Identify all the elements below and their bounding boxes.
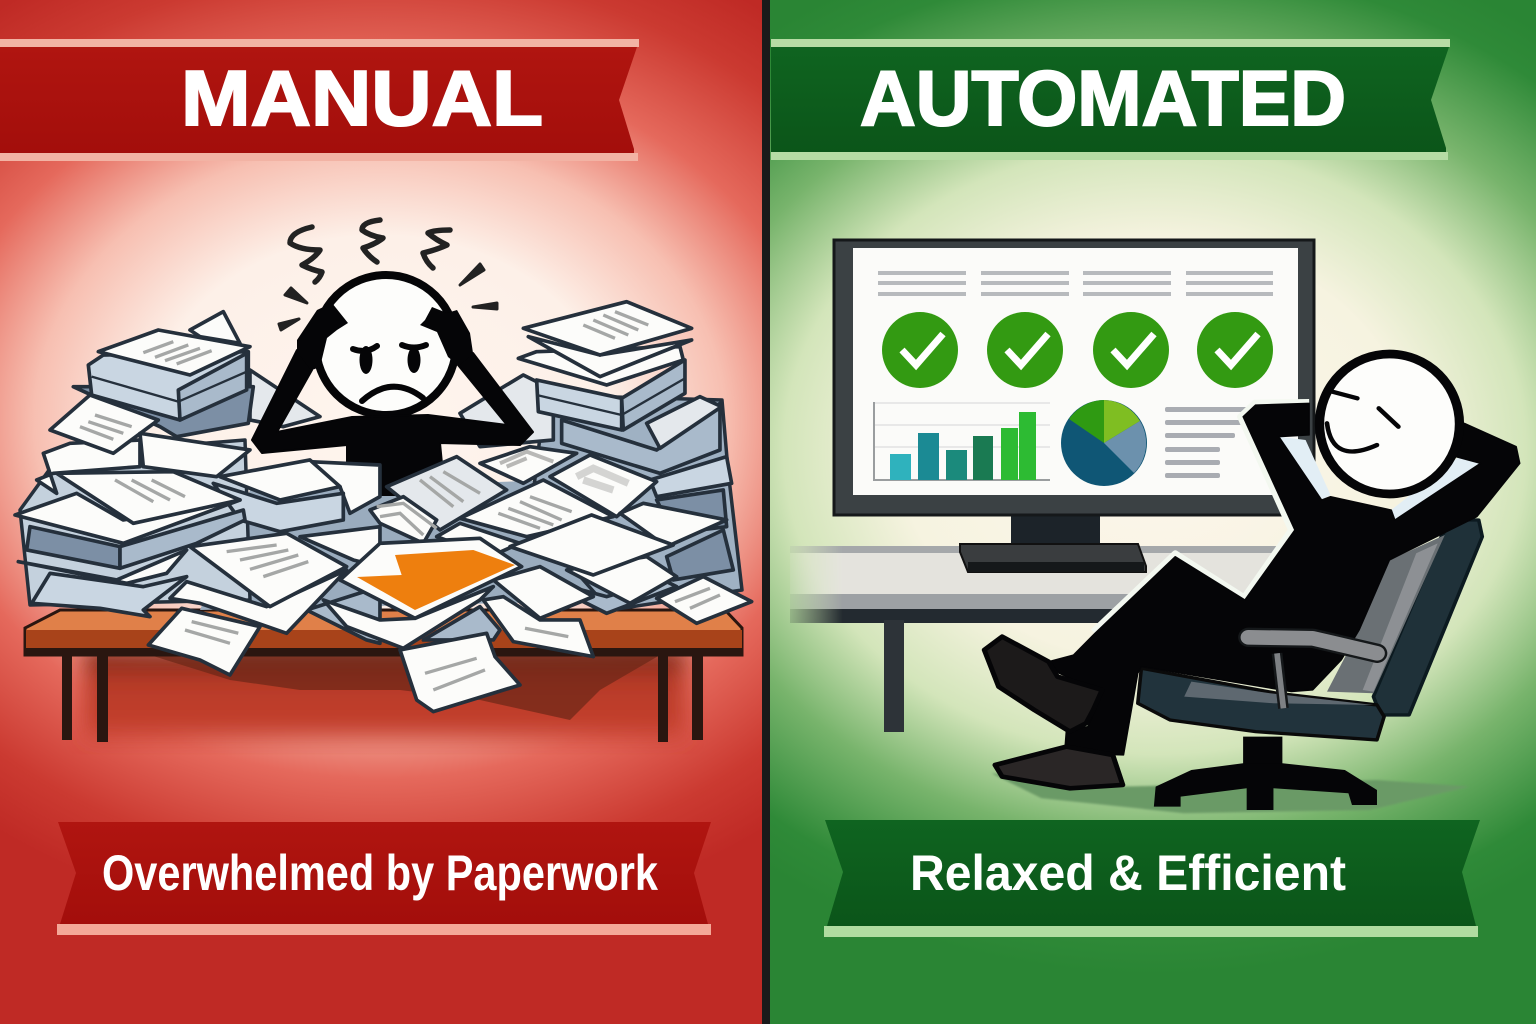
stress marks — [290, 220, 450, 282]
desk: manual — [25, 610, 742, 745]
outline around arm and leg — [1093, 402, 1309, 632]
bar chart — [874, 402, 1050, 480]
right filler stack — [530, 395, 742, 610]
monitor — [834, 240, 1314, 572]
office chair — [1138, 520, 1482, 810]
armrest — [1248, 637, 1377, 708]
head — [316, 275, 456, 415]
floor shoe — [995, 747, 1123, 788]
left filler stack — [20, 440, 250, 605]
alarm marks — [279, 264, 497, 330]
banner: overwhelmed caption — [57, 822, 711, 935]
banner: manual header — [0, 39, 639, 161]
center sheets and orange folder — [323, 538, 593, 712]
left back stack — [37, 312, 320, 493]
heading: MANUAL: MANUAL — [181, 54, 543, 142]
banner: relaxed caption — [824, 820, 1480, 937]
left front papers — [15, 460, 380, 675]
desk: automated — [790, 546, 1290, 732]
head — [1320, 354, 1459, 494]
filler mass under papers — [200, 480, 640, 610]
face — [353, 345, 426, 401]
body and limbs — [1049, 403, 1520, 755]
pie chart — [1061, 400, 1147, 486]
caption text: Relaxed & Efficient — [910, 845, 1346, 901]
list lines — [1165, 407, 1250, 478]
right back stack — [460, 302, 732, 533]
face — [1327, 392, 1398, 451]
scene: relaxed person in chair — [984, 354, 1520, 813]
raised shoe — [984, 637, 1102, 732]
check icons — [882, 312, 1273, 388]
stick figure: stressed — [252, 220, 533, 495]
center divider — [762, 0, 770, 1024]
panel: manual background — [0, 0, 764, 1024]
orange folder — [340, 538, 522, 618]
caption text: Overwhelmed by Paperwork — [102, 845, 658, 901]
panel: automated background — [770, 0, 1536, 1024]
heading: AUTOMATED: AUTOMATED — [860, 54, 1346, 142]
banner: automated header — [771, 39, 1450, 160]
right front papers — [370, 447, 752, 623]
floor shadow — [991, 773, 1470, 813]
paper piles: front papers — [15, 447, 752, 712]
arms and torso — [252, 350, 533, 495]
paper piles: back stacks — [20, 302, 742, 610]
header lines — [878, 271, 1273, 296]
light gaps by arms — [1279, 437, 1331, 500]
hands — [297, 303, 348, 370]
